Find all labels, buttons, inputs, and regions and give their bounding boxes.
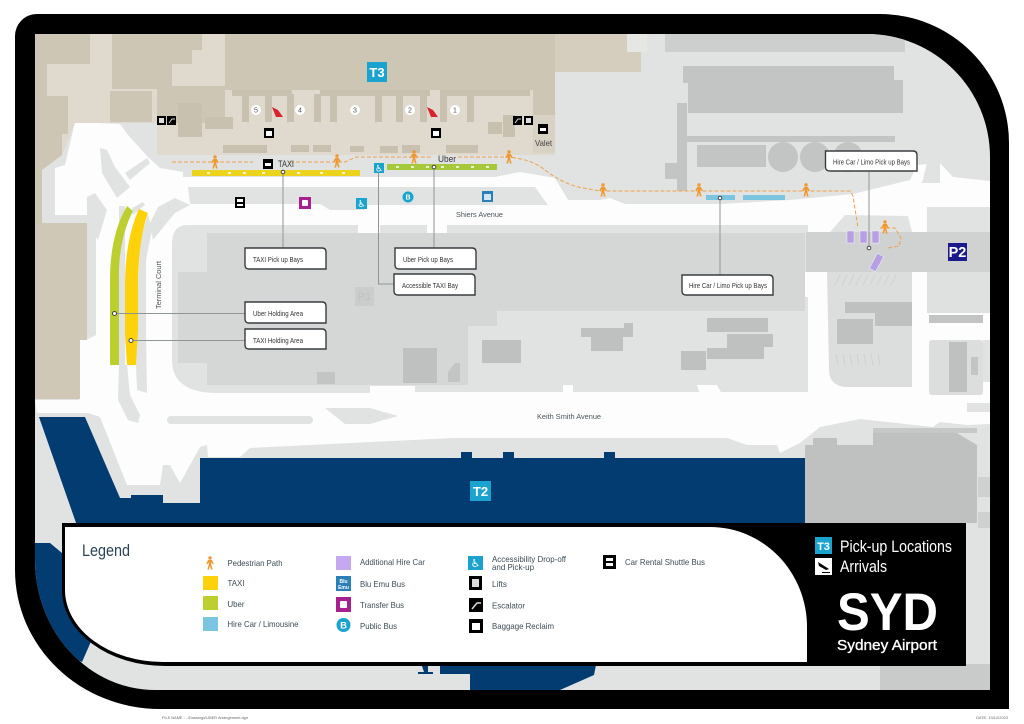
key: T3 pick-up locations: T3 bbox=[817, 541, 830, 553]
terminal 2: blue building bbox=[35, 417, 805, 690]
callout: TAXI pick up bays bbox=[245, 248, 326, 269]
terminal 3 precinct: tan buildings bbox=[35, 34, 647, 399]
legend column 3 bbox=[468, 554, 567, 633]
legend item: hire car: Hire Car / Limousine bbox=[228, 619, 299, 629]
leader dots bbox=[112, 165, 871, 342]
badge: P2: P2 bbox=[949, 245, 966, 261]
icon: blu emu bus bbox=[482, 191, 493, 202]
legend item: uber: Uber bbox=[228, 599, 245, 609]
icon: car rental shuttle bbox=[235, 197, 245, 208]
callout: uber holding area bbox=[245, 302, 326, 323]
key: arrivals bbox=[815, 558, 887, 576]
legend item: public bus bbox=[336, 618, 397, 632]
gate numbers: 5 bbox=[254, 108, 258, 114]
legend panel: white area bbox=[65, 527, 807, 662]
pedestrian path bbox=[172, 157, 901, 248]
key: arrivals: Arrivals bbox=[840, 558, 887, 576]
badge: T2 bbox=[470, 481, 491, 501]
icon: qantas tails bbox=[272, 107, 438, 117]
logo: SYD Sydney Airport: SYD bbox=[837, 583, 938, 642]
callout: Uber pick up bays bbox=[395, 248, 476, 269]
callout: hire car limo pick up bays, lower: Hire Car / Limo Pick up Bays bbox=[689, 281, 767, 290]
icon: transfer bus bbox=[299, 197, 311, 209]
gate numbers: 3 bbox=[353, 108, 357, 114]
icon: valet bbox=[538, 124, 548, 134]
callout: TAXI pick up bays: TAXI Pick up Bays bbox=[253, 255, 303, 264]
badge: T2: T2 bbox=[473, 484, 488, 499]
callout: hire car limo pick up bays, upper: Hire Car / Limo Pick up Bays bbox=[833, 158, 910, 166]
legend item: car rental shuttle bus bbox=[603, 555, 705, 569]
icon: taxi bbox=[263, 159, 273, 169]
callout: accessible taxi bay: Accessible TAXI Bay bbox=[402, 281, 458, 290]
label: Shiers Avenue: Shiers Avenue bbox=[456, 210, 503, 219]
legend item: public bus: B bbox=[340, 620, 347, 632]
icon: accessible drop-off: ♿ bbox=[357, 199, 366, 210]
central car park block: P1 bbox=[358, 291, 371, 303]
callout: uber holding area: Uber Holding Area bbox=[253, 309, 304, 318]
legend item: lifts: Lifts bbox=[492, 579, 507, 589]
callout: Uber pick up bays: Uber Pick up Bays bbox=[403, 255, 453, 264]
gate numbers: 2 bbox=[408, 108, 412, 114]
additional hire car bays bbox=[847, 231, 884, 272]
icon: public bus: B bbox=[405, 194, 411, 202]
icons: lifts and escalators, left bbox=[157, 116, 176, 125]
legend item: car rental shuttle bus: Car Rental Shuttle Bus bbox=[625, 557, 705, 567]
label: Terminal Court: Terminal Court bbox=[154, 260, 163, 309]
gate numbers: 1 bbox=[453, 108, 457, 114]
legend column 1 bbox=[203, 556, 299, 631]
footer: file name: FILE NAME : ..\Drawings\UBER Arrangement.dgn bbox=[162, 715, 248, 720]
logo: SYD Sydney Airport: Sydney Airport bbox=[837, 638, 937, 654]
legend item: transfer bus: Transfer Bus bbox=[360, 600, 404, 610]
terminal 3 piers bbox=[178, 90, 530, 153]
P2 car park zone bbox=[806, 232, 990, 412]
badge: T3: T3 bbox=[369, 65, 385, 80]
legend item: baggage reclaim: Baggage Reclaim bbox=[492, 621, 554, 631]
central car park block bbox=[172, 223, 810, 394]
icons: lifts and escalators, right bbox=[513, 116, 533, 125]
key: T3 pick-up locations bbox=[815, 537, 952, 556]
icons: baggage reclaim bbox=[264, 128, 441, 138]
label: TAXI: TAXI bbox=[278, 159, 294, 170]
callout: taxi holding area bbox=[245, 329, 326, 349]
icon: public bus bbox=[402, 192, 414, 202]
legend item: escalator: Escalator bbox=[492, 600, 525, 610]
icon: accessible taxi bay: ♿ bbox=[375, 164, 383, 174]
gate numbers bbox=[251, 105, 460, 115]
footer: date: DATE: 13/12/2023 bbox=[976, 715, 1009, 720]
callout: hire car limo pick up bays, upper bbox=[826, 151, 917, 171]
taxi pick up bays bbox=[192, 170, 360, 176]
leader lines bbox=[114, 168, 869, 340]
legend item: taxi: TAXI bbox=[228, 578, 244, 588]
callout: hire car limo pick up bays, lower bbox=[682, 275, 773, 295]
hire car pick up bays bbox=[706, 195, 785, 200]
legend panel: black block bbox=[62, 523, 966, 666]
legend column 2 bbox=[336, 556, 425, 632]
landside grey forecourt islands bbox=[87, 148, 990, 424]
uber holding area bbox=[110, 206, 133, 365]
pedestrian walkers bbox=[211, 150, 889, 234]
legend item: blu emu bus: Emu bbox=[338, 585, 349, 591]
legend title: Legend bbox=[82, 541, 130, 560]
terminal 2 satellite buildings bbox=[805, 428, 990, 690]
legend item: blu emu bus bbox=[336, 576, 405, 591]
legend item: accessibility bbox=[468, 554, 567, 572]
callout: accessible taxi bay bbox=[394, 274, 475, 295]
legend item: accessibility: ♿ bbox=[471, 557, 480, 570]
roads: white road network bbox=[35, 122, 990, 485]
key: T3 pick-up locations: Pick-up Locations bbox=[840, 538, 952, 556]
gate numbers: 4 bbox=[298, 108, 302, 114]
callout: taxi holding area: TAXI Holding Area bbox=[253, 336, 304, 345]
legend item: blu emu bus: Blu Emu Bus bbox=[360, 579, 405, 589]
legend item: accessibility: and Pick-up bbox=[492, 562, 534, 572]
taxi holding area bbox=[125, 209, 148, 365]
label: Keith Smith Avenue: Keith Smith Avenue bbox=[537, 412, 601, 421]
legend item: public bus: Public Bus bbox=[360, 621, 397, 631]
legend item: additional hire car: Additional Hire Car bbox=[360, 557, 425, 567]
legend item: accessibility: Accessibility Drop-off bbox=[492, 554, 567, 564]
label: Uber: Uber bbox=[438, 154, 456, 165]
uber pick up bays bbox=[387, 164, 497, 170]
badge: T3 bbox=[367, 62, 387, 82]
legend item: blu emu bus: Blu bbox=[339, 579, 348, 585]
legend item: pedestrian path: Pedestrian Path bbox=[228, 558, 283, 568]
label: valet: Valet bbox=[535, 138, 553, 148]
hire car buildings bbox=[665, 34, 905, 191]
